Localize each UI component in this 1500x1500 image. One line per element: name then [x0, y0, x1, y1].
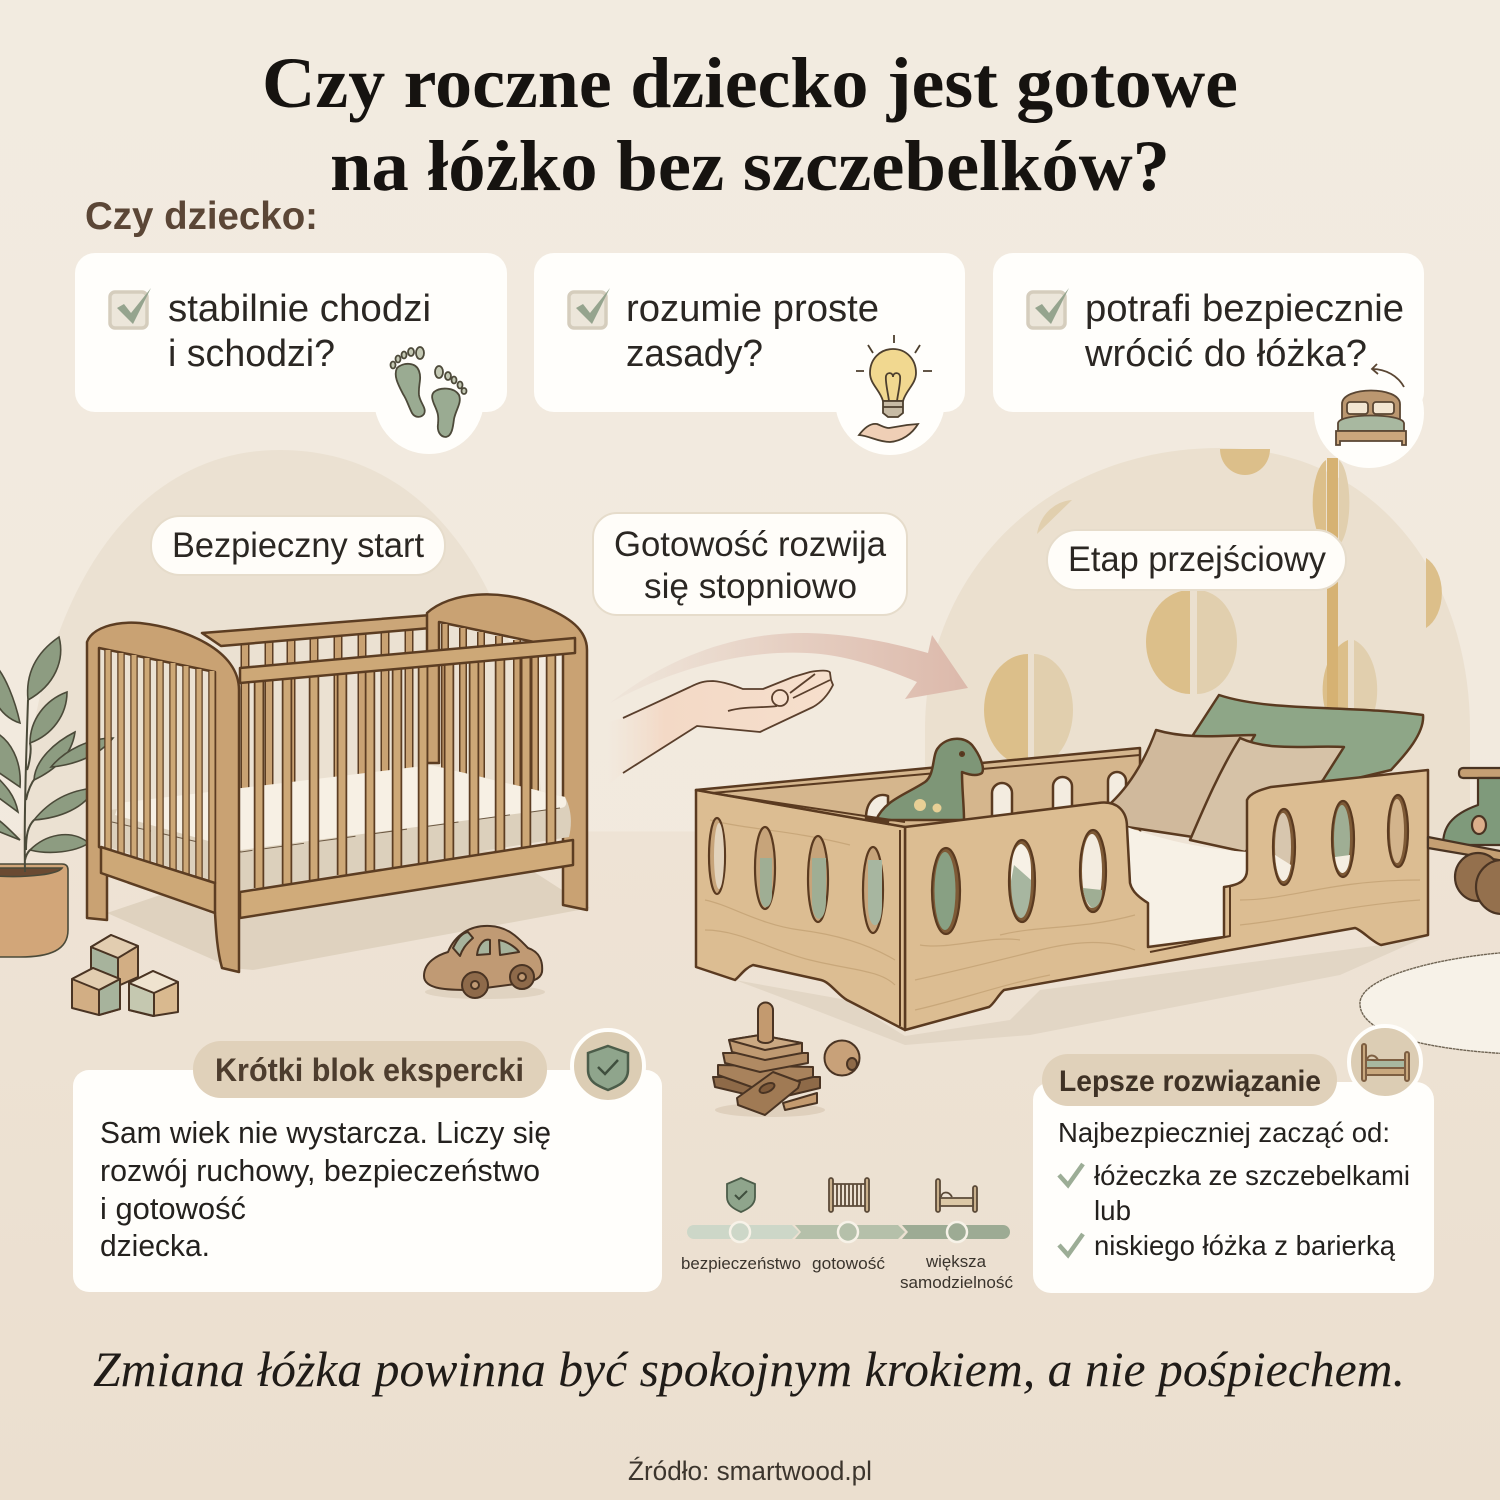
title: Czy roczne dziecko jest gotowe [262, 43, 1238, 123]
expert text: i gotowość [100, 1191, 246, 1226]
front slats [259, 656, 551, 888]
icon: shield [727, 1178, 755, 1212]
wooden ball [824, 1040, 860, 1076]
title: na łóżko bez szczebelków? [330, 126, 1170, 206]
timeline labels: bezpieczeństwo [681, 1255, 801, 1273]
left slats [108, 650, 212, 883]
leaves [0, 637, 113, 852]
expert text: rozwój ruchowy, bezpieczeństwo [100, 1153, 540, 1188]
label: transition stage [1047, 530, 1346, 590]
card text: zasady? [626, 333, 763, 375]
solution text: Najbezpieczniej zacząć od: [1058, 1117, 1390, 1148]
transition bed [696, 695, 1428, 1030]
label: safe start [151, 516, 445, 575]
label: safe start: Bezpieczny start [172, 526, 424, 565]
card text [626, 288, 879, 375]
heading pill: Krótki blok ekspercki [215, 1052, 524, 1088]
timeline labels: samodzielność [900, 1274, 1013, 1292]
bed badge [1349, 1026, 1421, 1098]
beige pillow back [1111, 730, 1255, 837]
left end panel [696, 790, 905, 1030]
section heading: Czy dziecko: [85, 195, 318, 238]
right end panel [427, 594, 587, 910]
solution text [1058, 1117, 1410, 1261]
front top rail [240, 638, 575, 683]
check marks [1059, 1164, 1083, 1255]
timeline bar [687, 1225, 1010, 1239]
left wall arch [22, 450, 545, 840]
solution text: łóżeczka ze szczebelkami [1094, 1160, 1410, 1191]
card text: wrócić do łóżka? [1084, 333, 1367, 375]
long side panel [905, 770, 1428, 1030]
plywood grain [705, 820, 1420, 1010]
beige pillow front [1190, 738, 1344, 852]
front bottom rail [240, 840, 573, 918]
timeline labels: większa [925, 1253, 987, 1271]
icon: small bed with arrow [1336, 364, 1406, 445]
back slats [245, 629, 409, 795]
stems [25, 700, 51, 872]
mattress [107, 765, 571, 890]
back slots [866, 772, 1126, 833]
pot [0, 864, 68, 957]
shadow under transition bed [735, 935, 1430, 1045]
shield badge [572, 1030, 644, 1102]
expert text: dziecka. [100, 1228, 210, 1263]
checkbox icon [1028, 288, 1069, 328]
panel: better solution [1033, 1026, 1434, 1293]
card text [1084, 288, 1404, 375]
icon: footprints [390, 347, 466, 437]
toy car [424, 926, 545, 999]
checkbox icon [569, 288, 610, 328]
left bottom rail [101, 847, 215, 913]
timeline labels [681, 1253, 1013, 1292]
solution text: lub [1094, 1195, 1131, 1226]
heading pill: Lepsze rozwiązanie [1059, 1065, 1321, 1098]
dinosaur toy [876, 739, 983, 820]
label: transition stage: Etap przejściowy [1068, 540, 1326, 579]
icon: open hand [608, 671, 833, 785]
crib [87, 594, 587, 972]
back panel [696, 748, 1140, 880]
icon: light bulb on hand [856, 335, 932, 442]
card: walks steadily [75, 253, 507, 454]
timeline labels: gotowość [812, 1255, 885, 1273]
icon: crib [829, 1178, 869, 1212]
label: readiness develops gradually: Gotowość rozwija [614, 525, 887, 564]
plant [0, 637, 113, 957]
right wall arch with wallpaper shapes [925, 448, 1470, 830]
expert text [100, 1115, 551, 1263]
mattress [1127, 827, 1248, 945]
source: Źródło: smartwood.pl [628, 1456, 872, 1486]
back rail [202, 615, 431, 646]
wooden blocks [72, 935, 178, 1016]
left end panel [87, 623, 239, 972]
step cutout lip [1150, 887, 1230, 952]
oval slots [709, 795, 1408, 934]
checkbox icon [110, 288, 151, 328]
green pillow [1193, 695, 1423, 792]
label: readiness develops gradually: się stopniowo [644, 567, 857, 606]
panel: expert note [73, 1030, 662, 1292]
heading pill [193, 1041, 547, 1098]
card text: i schodzi? [168, 333, 335, 375]
card: returns to bed [993, 253, 1424, 468]
card text: potrafi bezpiecznie [1085, 288, 1404, 330]
timeline nodes [730, 1222, 967, 1242]
round rug [1360, 952, 1500, 1054]
toy train [1428, 768, 1500, 914]
card text: rozumie proste [626, 288, 879, 330]
card text: stabilnie chodzi [168, 288, 431, 330]
wooden stacking toy [713, 1003, 825, 1117]
card text [168, 288, 431, 375]
icon: low bed [936, 1179, 977, 1212]
expert text: Sam wiek nie wystarcza. Liczy się [100, 1115, 551, 1150]
shadow under crib [107, 850, 590, 970]
progress timeline [681, 1178, 1013, 1292]
title [262, 43, 1238, 206]
heading pill [1042, 1054, 1337, 1106]
label: readiness develops gradually [593, 513, 907, 615]
solution text: niskiego łóżka z barierką [1094, 1230, 1395, 1261]
card: understands rules [534, 253, 965, 455]
closing statement: Zmiana łóżka powinna być spokojnym krokiem, a nie pośpiechem. [93, 1341, 1405, 1397]
arrow: pink swoosh [610, 633, 968, 703]
